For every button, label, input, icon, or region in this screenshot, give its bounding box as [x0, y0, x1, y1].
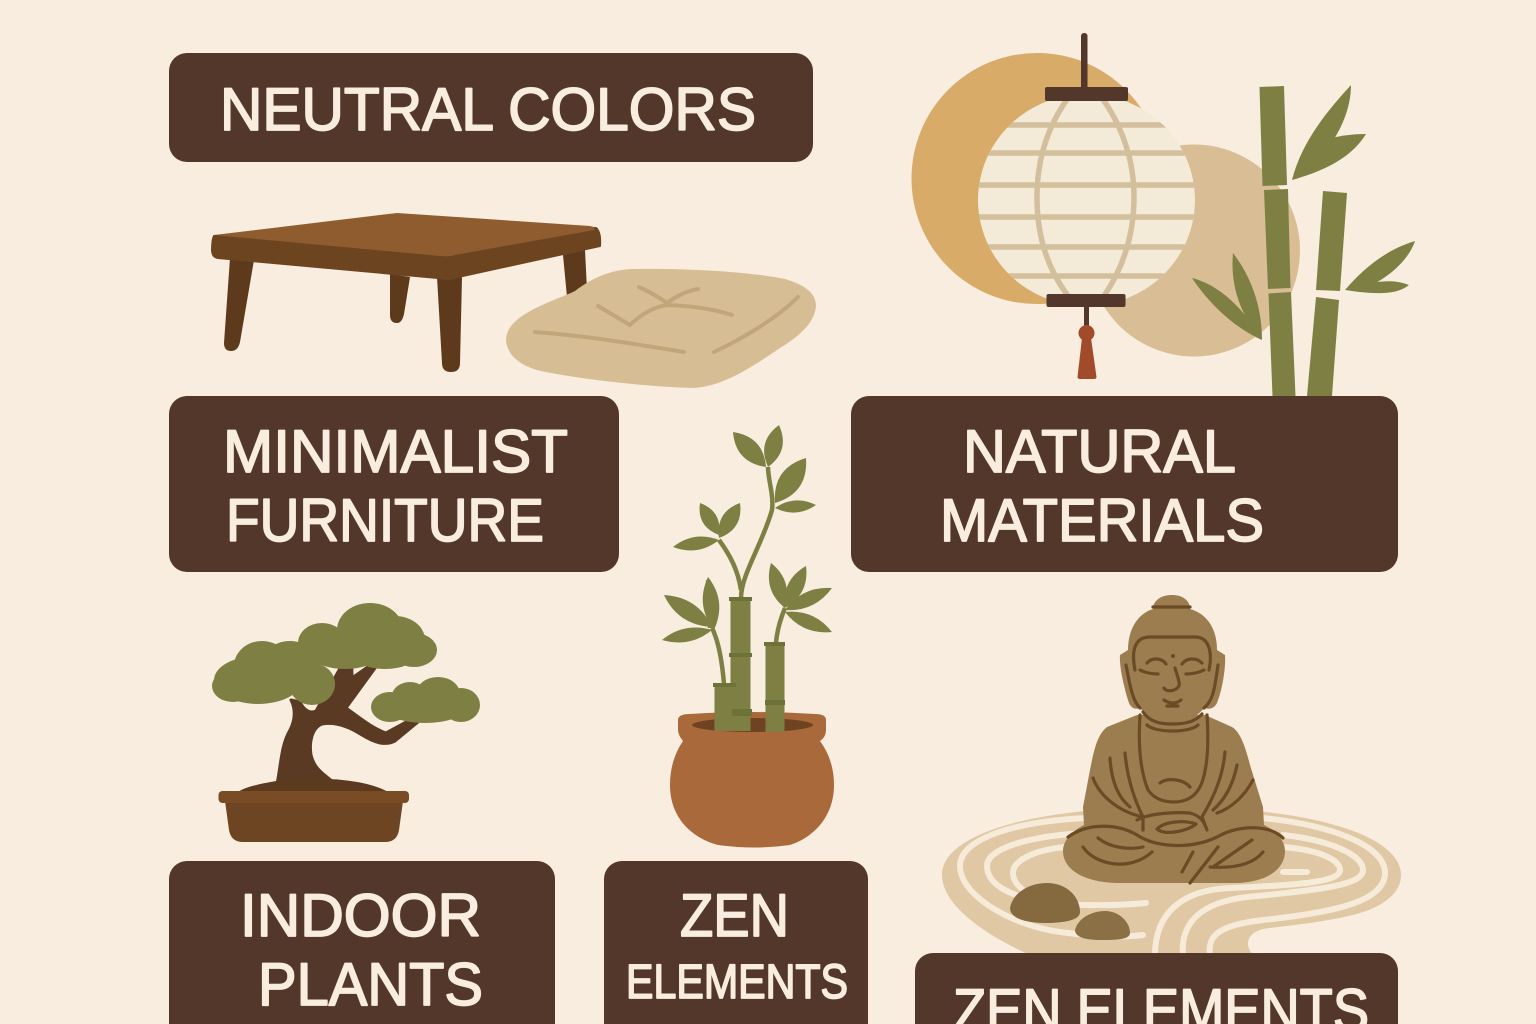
illustration: meditating buddha statue [1063, 595, 1285, 883]
thin stems [708, 467, 785, 684]
illustration: bonsai tree [212, 603, 480, 842]
sand bed [942, 807, 1401, 955]
heading: minimalist: MINIMALIST [223, 418, 568, 485]
left tall leaf [1232, 253, 1262, 340]
heading: neutral colors: NEUTRAL COLORS [220, 76, 756, 143]
forehead dot [1171, 654, 1175, 658]
bonsai pot body [225, 801, 403, 842]
statue line work [1068, 607, 1283, 883]
panel: natural materials [851, 396, 1398, 572]
statue body [1063, 715, 1285, 883]
terracotta pot [670, 712, 834, 848]
heading: natural: NATURAL [963, 418, 1236, 485]
upper small leaf [1292, 134, 1366, 180]
lantern cord [1084, 306, 1089, 328]
gold circle [912, 53, 1162, 304]
table top [214, 213, 594, 256]
table legs [224, 250, 587, 372]
lantern top bar [1045, 87, 1128, 101]
panel: minimalist furniture [169, 396, 619, 572]
heading: zen: ZEN [680, 882, 789, 949]
illustration: raked zen sand garden [942, 807, 1401, 955]
heading: furniture: FURNITURE [226, 487, 544, 554]
heading: materials: MATERIALS [940, 487, 1264, 554]
bamboo stems in pot [713, 597, 785, 732]
bonsai foliage [212, 603, 480, 723]
illustration: potted bamboo plant [662, 425, 834, 848]
illustration: stones [1010, 883, 1130, 940]
lantern tassel [1078, 325, 1096, 379]
heading: indoor: INDOOR [240, 882, 481, 949]
upper leaves [1292, 85, 1351, 180]
lantern globe [978, 101, 1195, 299]
illustration: floor cushion [506, 269, 816, 388]
panel: indoor plants [169, 861, 555, 1024]
illustration: paper lantern with circles [912, 33, 1300, 379]
bonsai soil [238, 778, 388, 792]
large stone [1010, 883, 1080, 923]
illustration: bamboo stalks [1192, 85, 1415, 396]
leaves [662, 425, 832, 642]
tan circle [1088, 144, 1300, 356]
panel: zen elements small [604, 861, 868, 1024]
illustration: low table [212, 213, 600, 372]
left stalk [1260, 86, 1296, 396]
right stalk [1307, 191, 1347, 396]
panel: neutral colors [169, 53, 813, 162]
cushion stitching [535, 287, 798, 352]
cushion body [506, 269, 816, 388]
statue head [1120, 595, 1225, 723]
pot opening [692, 718, 813, 732]
heading: elements: ELEMENTS [626, 956, 848, 1009]
left leaf [1192, 278, 1262, 340]
bonsai pot rim [218, 791, 409, 803]
right small leaf [1345, 281, 1409, 293]
heading: plants: PLANTS [258, 951, 483, 1018]
panel: zen elements large [915, 953, 1398, 1024]
small stone [1075, 911, 1130, 940]
right leaf [1345, 241, 1415, 290]
rake lines [960, 818, 1385, 955]
lantern hanger rod [1081, 33, 1088, 93]
table apron [212, 228, 600, 279]
bonsai trunk [277, 652, 418, 784]
lantern bottom bar [1046, 294, 1126, 307]
